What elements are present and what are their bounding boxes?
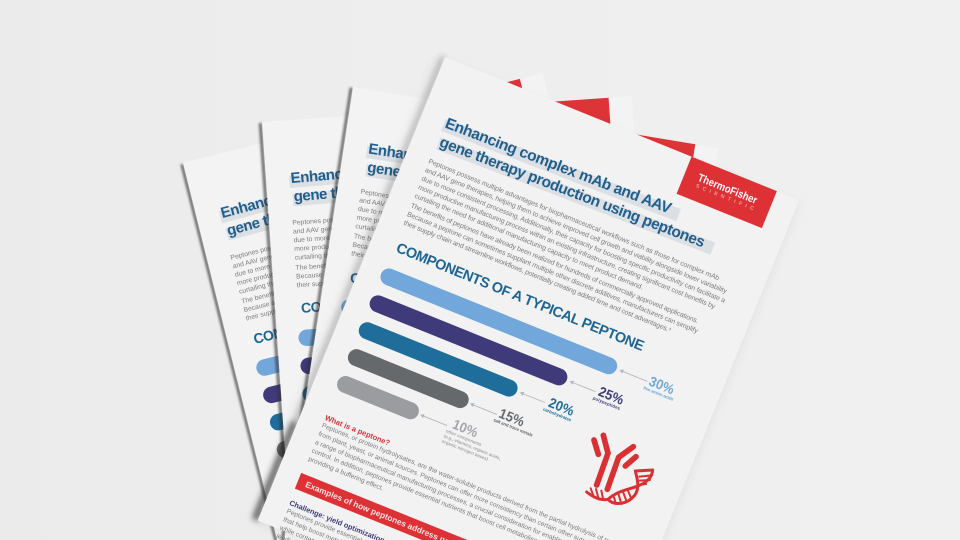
- page 3: second copy: [259, 96, 666, 540]
- title: [363, 140, 652, 219]
- title: gene therapy production using peptones: [293, 165, 568, 205]
- bars: [336, 298, 585, 383]
- label: 25% polypeptides: 25%: [596, 383, 627, 408]
- title: gene therapy production using peptones: [437, 134, 707, 251]
- fanned document stack: [180, 54, 801, 540]
- intro text: Peptones possess multiple advantages: [292, 212, 411, 227]
- heading: COMPONENTS OF A TYPICAL PEPTONE: [394, 240, 647, 355]
- intro text: Because a peptone can sometimes: [296, 266, 403, 281]
- label: 30% free amino acids: free amino acids: [643, 385, 675, 402]
- label: 30% free amino acids: 30%: [647, 373, 677, 398]
- title: [288, 145, 578, 207]
- intro text: [402, 158, 733, 349]
- title: Enhancing complex mAb and AAV: [367, 141, 601, 192]
- label: 15% salt and trace metals: 15%: [497, 405, 527, 430]
- intro text: Peptones possess multiple advantages: [360, 189, 477, 215]
- intro text: Because a peptone can sometimes: [243, 282, 348, 314]
- intro text: and AAV gene therapies, helping them: [232, 236, 346, 270]
- intro text: Peptones possess multiple advantages: [230, 226, 346, 262]
- label: 10% other components: 10%: [450, 416, 481, 441]
- logo: Thermo Fisher Scientific: [677, 157, 777, 228]
- page 2: third copy: [277, 86, 718, 540]
- bar chart: components of a typical peptone: [334, 266, 620, 484]
- intro text: The benefits of peptones have already: [295, 257, 412, 272]
- label: 10% other components: [441, 414, 509, 466]
- red banner: [295, 473, 613, 540]
- page 4: back left copy: [180, 73, 660, 540]
- intro text: [230, 226, 363, 323]
- intro text: Because a peptone can sometimes: [352, 242, 458, 266]
- bar: polypeptides: [367, 293, 570, 388]
- intro text: more productive manufacturing process: [356, 214, 475, 241]
- what is a peptone text block: What is a peptone?: [324, 413, 392, 448]
- intro text: The benefits of peptones have already: [241, 271, 355, 306]
- heading: COMPONENTS OF A TYPICAL PEPTONE: [300, 282, 559, 316]
- title: Enhancing complex mAb and AAV: [219, 145, 449, 222]
- label: 15% salt and trace metals: salt and trace metals: [493, 417, 534, 438]
- title: gene therapy production using peptones: [366, 159, 640, 216]
- intro text: [292, 212, 416, 289]
- intro text: more productive manufacturing process: [294, 238, 414, 253]
- label: 10% other components: (e.g., vitamins, organic acids,: [443, 433, 502, 461]
- bars: [298, 313, 549, 403]
- intro text: their supply chain and streamline: [245, 292, 343, 323]
- intro text: more productive manufacturing process: [236, 252, 354, 287]
- label: 20% carbohydrates: carbohydrates: [542, 407, 573, 423]
- heading: COMPONENTS OF A TYPICAL PEPTONE: [252, 269, 506, 347]
- logo block: [519, 98, 611, 143]
- intro text: and AAV gene therapies, helping them: [359, 197, 474, 223]
- page 1: front document: [246, 54, 801, 540]
- bar: salt and trace metals: [345, 347, 471, 411]
- title: Enhancing complex mAb and AAV: [290, 150, 524, 187]
- intro text: curtailing the need for additional: [238, 266, 334, 296]
- label: 20% carbohydrates: 20%: [546, 394, 577, 419]
- bar: other components: [334, 373, 421, 422]
- intro text: curtailing the need for additional: [355, 223, 451, 246]
- title: Enhancing complex mAb and AAV: [443, 115, 674, 218]
- bar: carbohydrates: [356, 320, 520, 399]
- intro text: curtailing the need for additional: [295, 248, 392, 262]
- bars: [255, 302, 518, 459]
- intro text: curtailing the need for additional manufacturing capacity to meet product demand.: [413, 193, 644, 292]
- icon: antibody and DNA helix: [587, 435, 653, 504]
- intro text: and AAV gene therapies, helping them to achieve improved cell growth and viability alongside lower variability: [424, 167, 728, 295]
- intro text: The benefits of peptones have already: [353, 233, 468, 259]
- label: 25% polypeptides: polypeptides: [592, 395, 621, 411]
- logo: Thermo Fisher Scientific: SCIENTIFIC: [695, 183, 755, 212]
- bar: free amino acids: [378, 266, 620, 377]
- title: gene therapy production using peptones: [225, 152, 495, 239]
- intro text: their supply chain and streamline workflows, potentially creating added time and cost advantages.⁴: [402, 220, 672, 334]
- intro text: Because a peptone can sometimes supplant multiple other discrete additives, manufacturers can simplify: [406, 211, 699, 335]
- challenge text block: [274, 498, 445, 540]
- intro text: [351, 189, 479, 277]
- intro text: due to more consistent processing. Additionally, their capacity for boosting specific productivity can facilitate a: [420, 176, 726, 305]
- intro text: due to more consistent processing.: [234, 247, 338, 279]
- intro text: due to more consistent processing.: [357, 206, 462, 230]
- arrows: [419, 305, 648, 491]
- heading: COMPONENTS OF A TYPICAL PEPTONE: [349, 269, 606, 328]
- intro text: The benefits of peptones have already been realized for hundreds of commercially approved applications.: [409, 203, 699, 325]
- logo block: [433, 79, 529, 138]
- label: 15% salt and trace metals: [493, 404, 539, 438]
- intro text: Peptones possess multiple advantages for biopharmaceutical workflows such as those for complex mAb: [427, 158, 720, 282]
- logo: Thermo Fisher Scientific: ThermoFisher: [696, 172, 759, 207]
- label: 10% other components: other components: [445, 428, 483, 447]
- intro text: and AAV gene therapies, helping them: [293, 221, 409, 236]
- intro text: due to more consistent processing.: [293, 230, 399, 244]
- intro text: their supply chain and streamline: [297, 275, 396, 289]
- logo block: [601, 130, 695, 183]
- intro text: their supply chain and streamline: [351, 250, 449, 274]
- intro text: more productive manufacturing process within an existing infrastructure, creating significant cost benefits by: [417, 184, 717, 311]
- label: 10% other components: organic nitrogen bases): [441, 438, 489, 462]
- what is a peptone text block: providing a buffering effect.: [307, 456, 384, 492]
